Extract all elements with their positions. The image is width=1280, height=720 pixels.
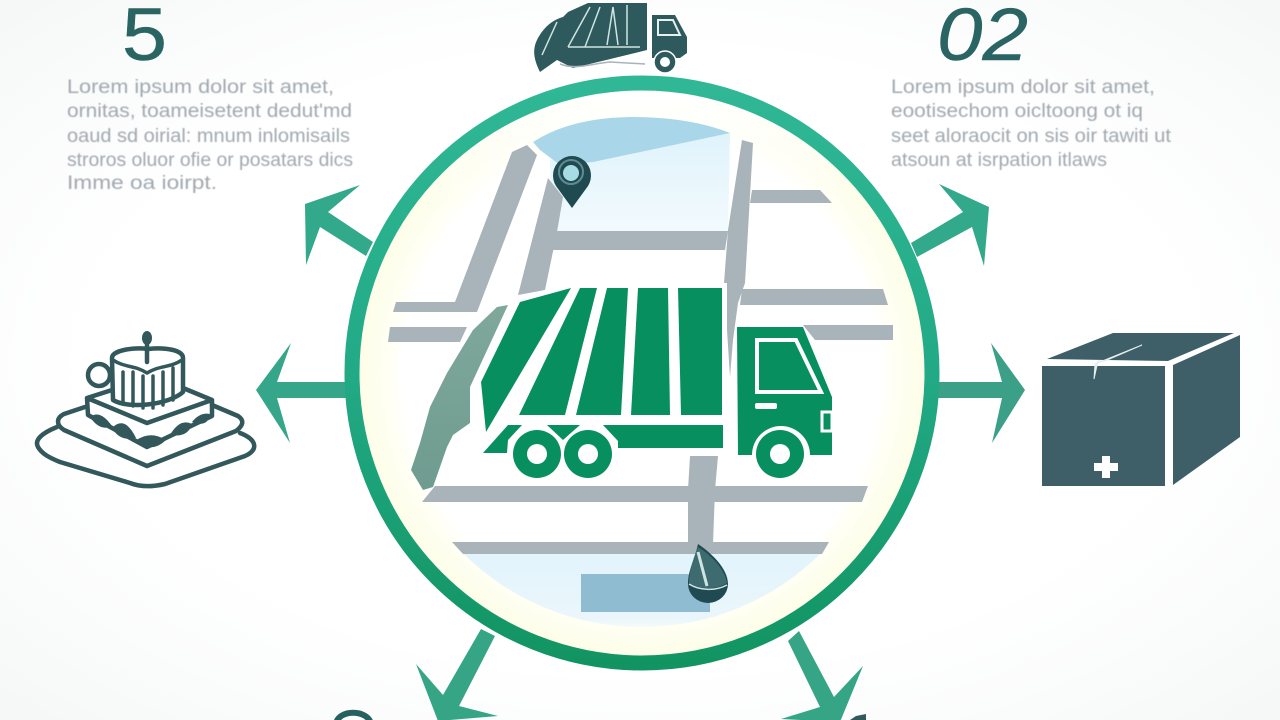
scallops <box>90 414 210 447</box>
icon: location pin top <box>553 156 591 208</box>
truck chassis <box>483 425 723 453</box>
truck compartments <box>481 288 722 432</box>
candle <box>142 331 152 362</box>
icon: box <box>1042 333 1240 486</box>
truck white halo <box>480 283 727 422</box>
text block: top right: Lorem ipsum dolor sit amet, <box>891 77 1155 98</box>
map: water area top <box>533 117 730 165</box>
arrow: left <box>256 343 350 443</box>
cab headlight <box>822 412 832 431</box>
top tier <box>87 388 212 447</box>
map: blue block <box>581 574 710 612</box>
cup handle <box>88 364 110 386</box>
text block: top left <box>67 77 353 194</box>
front wheel <box>756 430 804 478</box>
central circle <box>352 83 932 663</box>
rear wheel <box>510 427 564 481</box>
cab window <box>757 340 821 392</box>
text block: top right: eootisechom oicltoong ot iq <box>891 101 1143 122</box>
arrow: right <box>936 343 1025 443</box>
middle wheel <box>561 427 615 481</box>
arrow: bottom left <box>416 629 498 720</box>
text block: top left: stroros oluor ofie or posatars dics <box>67 150 353 171</box>
icon: cake on plates <box>37 331 254 486</box>
text block: top left: ornitas, toameisetent dedut'md <box>67 101 352 122</box>
partial label bottom left <box>336 713 371 720</box>
middle plate <box>58 405 242 466</box>
text block: top right: seet aloraocit on sis oir tawiti ut <box>891 126 1172 147</box>
truck cab <box>737 327 832 455</box>
text block: top left: Lorem ipsum dolor sit amet, <box>67 77 334 98</box>
arrow: bottom right <box>781 631 863 720</box>
text block: top left: oaud sd oirial: mnum inlomisails <box>67 126 350 147</box>
map: roads <box>388 140 893 554</box>
icon: drop pin bottom <box>688 544 728 603</box>
icon: small truck top <box>534 3 687 73</box>
cab handle <box>755 403 777 409</box>
icon: main garbage truck <box>481 288 832 481</box>
partial icon bottom right <box>850 714 866 720</box>
outer plate <box>37 427 254 486</box>
text block: top right <box>891 77 1172 171</box>
cake body <box>112 348 183 405</box>
text block: top right: atsoun at isrpation itlaws <box>891 150 1107 171</box>
text block: top left: Imme oa ioirpt. <box>67 173 217 194</box>
truck shadow <box>411 305 508 490</box>
map: light blue area bottom <box>464 554 820 627</box>
arrow: top left <box>305 185 373 265</box>
map: light blue area top <box>550 133 730 240</box>
arrow: top right <box>911 184 989 266</box>
